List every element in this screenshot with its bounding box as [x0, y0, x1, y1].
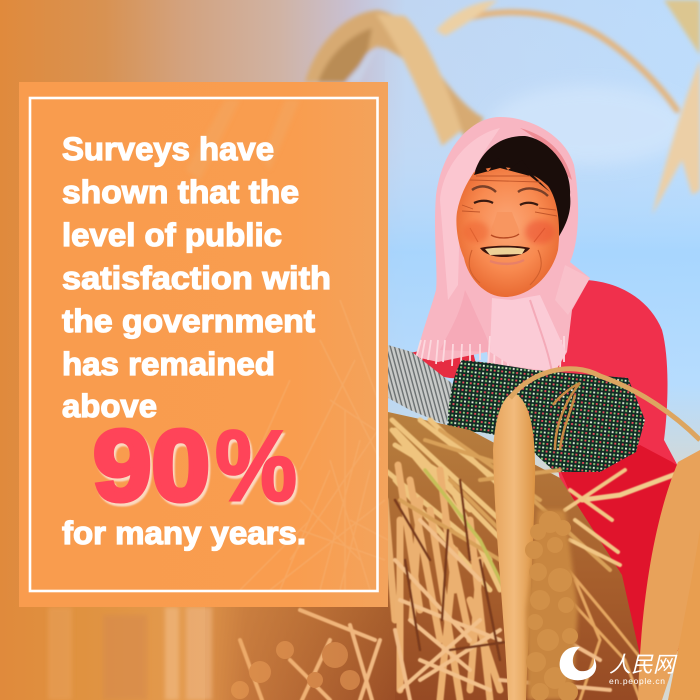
90% figure: 90: [95, 413, 212, 525]
statement text: the government: [62, 303, 315, 339]
hay sheaf: [205, 412, 700, 700]
statement text: satisfaction with: [62, 260, 331, 296]
foreground leaves: [493, 369, 700, 700]
headscarf: [416, 117, 590, 372]
statement text: [62, 131, 331, 551]
statement text: level of public: [62, 217, 282, 253]
90% figure: 90: [93, 410, 210, 522]
knotted scarf: [490, 295, 566, 372]
logo name: 人民网: [609, 647, 678, 679]
logo URL: en.people.cn: [609, 676, 665, 686]
statement text: shown that the: [62, 174, 299, 210]
red jacket: [410, 280, 700, 670]
90% figure: %: [215, 410, 297, 522]
statement text: Surveys have: [62, 131, 274, 167]
dotted sleeve: [447, 360, 645, 472]
logo emblem: [560, 647, 596, 680]
inner white frame: [30, 98, 378, 591]
statement text: for many years.: [62, 515, 306, 551]
left photo fade: [0, 600, 395, 700]
woman: [388, 117, 700, 670]
statement text: above: [62, 388, 157, 424]
millet head: [525, 510, 578, 700]
statement text: has remained: [62, 346, 275, 382]
text panel: [19, 82, 388, 607]
90% figure: %: [217, 413, 299, 525]
grain clusters under the wash: [231, 641, 360, 699]
logo: People's Daily Online: [560, 647, 678, 686]
hair: [474, 136, 570, 238]
striped cuff: [388, 345, 454, 425]
face: [456, 158, 559, 297]
90% figure: [93, 410, 299, 525]
blurred millet stems at top: [305, 0, 700, 215]
